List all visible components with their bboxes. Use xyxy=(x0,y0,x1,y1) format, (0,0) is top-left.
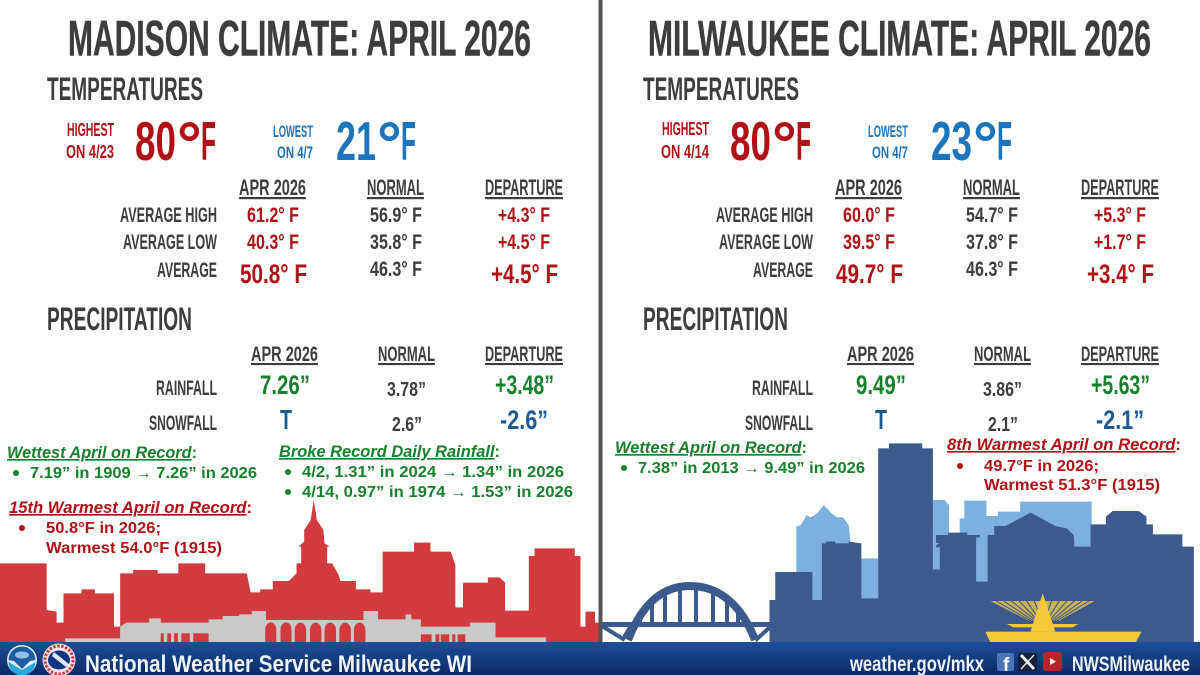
panel: Madison climate xyxy=(0,10,600,642)
temperature table: 61.2° F xyxy=(247,204,299,227)
icon: Facebook xyxy=(997,653,1014,675)
note: broke daily rainfall record: Broke Record Daily Rainfall: xyxy=(279,443,500,461)
temperature table: 40.3° F xyxy=(247,231,299,254)
divider between panels xyxy=(598,0,602,642)
lowest temperature callout: ON 4/7 xyxy=(872,143,908,162)
icon: NWS logo xyxy=(42,644,76,675)
temperature table: 56.9° F xyxy=(370,204,422,227)
note: wettest April xyxy=(615,439,865,477)
panel: Madison climate: F xyxy=(201,110,216,172)
highest temperature callout xyxy=(661,110,811,179)
icon: X xyxy=(1018,653,1037,671)
precipitation table: APR 2026 xyxy=(847,343,914,366)
temperature table: +4.5° F xyxy=(498,231,550,254)
note: warmest April rank: 50.8°F in 2026; xyxy=(46,520,161,537)
panel: Milwaukee climate: F xyxy=(796,110,811,172)
temperature table: 60.0° F xyxy=(843,204,895,227)
temperature table: +4.3° F xyxy=(498,204,550,227)
bridge xyxy=(602,586,770,640)
note: wettest April: Wettest April on Record: xyxy=(615,439,807,457)
lowest temperature callout: 23 xyxy=(931,110,972,172)
heading: precipitation: PRECIPITATION xyxy=(643,301,788,337)
temperature table: NORMAL xyxy=(963,175,1020,200)
precipitation table: RAINFALL xyxy=(156,377,217,400)
temperature table: AVERAGE HIGH xyxy=(716,204,813,227)
title: Madison: MADISON CLIMATE: APRIL 2026 xyxy=(68,10,531,66)
precipitation table xyxy=(149,343,563,436)
temperature table xyxy=(120,175,563,289)
panel: Milwaukee climate xyxy=(602,10,1194,642)
temperature table: NORMAL xyxy=(367,175,424,200)
temperature table: +3.4° F xyxy=(1087,259,1154,289)
panel: Madison climate: F xyxy=(401,110,416,172)
note: warmest April rank: Warmest 51.3°F (1915) xyxy=(984,477,1160,494)
icon: NOAA logo xyxy=(7,645,37,675)
temperature table: AVERAGE xyxy=(753,259,813,282)
precipitation table: 9.49” xyxy=(856,370,906,400)
note: wettest April: 7.38” in 2013 → 9.49” in 2026 xyxy=(638,460,865,477)
precipitation table: +5.63” xyxy=(1091,370,1150,400)
temperature table: 37.8° F xyxy=(966,231,1018,254)
highest temperature callout: 80 xyxy=(730,110,771,172)
temperature table: 50.8° F xyxy=(240,259,307,289)
highest temperature callout: HIGHEST xyxy=(67,120,114,140)
lowest temperature callout: LOWEST xyxy=(868,122,908,141)
note: warmest April rank xyxy=(9,499,252,557)
highest temperature callout: ON 4/14 xyxy=(661,142,709,162)
note: warmest April rank: 49.7°F in 2026; xyxy=(984,458,1099,475)
precipitation table: -2.6” xyxy=(500,405,548,435)
precipitation table xyxy=(745,343,1159,436)
note: warmest April rank xyxy=(947,436,1181,494)
temperature table: DEPARTURE xyxy=(485,175,563,200)
note: broke daily rainfall record: 4/14, 0.97” in 1974 → 1.53” in 2026 xyxy=(302,484,573,501)
precipitation table: +3.48” xyxy=(495,370,554,400)
heading: precipitation: PRECIPITATION xyxy=(47,301,192,337)
precipitation table: SNOWFALL xyxy=(745,412,813,435)
precipitation table: T xyxy=(280,404,292,435)
precipitation table: 7.26” xyxy=(260,370,310,400)
temperature table: 46.3° F xyxy=(966,258,1018,281)
icon: YouTube xyxy=(1043,652,1062,671)
precipitation table: RAINFALL xyxy=(752,377,813,400)
precipitation table: 3.78” xyxy=(387,379,426,401)
highest temperature callout xyxy=(66,110,216,179)
lowest temperature callout: LOWEST xyxy=(273,122,313,141)
heading: temperatures: TEMPERATURES xyxy=(47,71,203,107)
temperature table: 46.3° F xyxy=(370,258,422,281)
precipitation table: NORMAL xyxy=(378,343,435,366)
temperature table: +4.5° F xyxy=(491,259,558,289)
temperature table: AVERAGE LOW xyxy=(123,231,217,254)
highest temperature callout: ON 4/23 xyxy=(66,142,114,162)
highest temperature callout: ° xyxy=(177,110,202,179)
note: wettest April xyxy=(7,444,257,482)
temperature table: 39.5° F xyxy=(843,231,895,254)
temperature table xyxy=(716,175,1159,289)
lowest temperature callout: 21 xyxy=(336,110,376,172)
lowest temperature callout xyxy=(868,110,1012,179)
panel: Milwaukee climate: F xyxy=(997,110,1012,172)
note: warmest April rank: Warmest 54.0°F (1915) xyxy=(46,540,222,557)
temperature table: +5.3° F xyxy=(1094,204,1146,227)
note: broke daily rainfall record: 4/2, 1.31” in 2024 → 1.34” in 2026 xyxy=(302,464,564,481)
highest temperature callout: ° xyxy=(772,110,797,179)
note: warmest April rank: 15th Warmest April on Record: xyxy=(9,499,252,517)
temperature table: APR 2026 xyxy=(239,175,306,200)
temperature table: +1.7° F xyxy=(1094,231,1146,254)
note: warmest April rank: 8th Warmest April on Record: xyxy=(947,436,1181,454)
heading: temperatures: TEMPERATURES xyxy=(643,71,799,107)
temperature table: 35.8° F xyxy=(370,231,422,254)
precipitation table: NORMAL xyxy=(974,343,1031,366)
note: broke daily rainfall record xyxy=(279,443,573,501)
lowest temperature callout: ON 4/7 xyxy=(277,143,313,162)
temperature table: AVERAGE LOW xyxy=(719,231,813,254)
footer bar xyxy=(0,642,1200,675)
Madison skyline with capitol xyxy=(0,500,600,642)
lowest temperature callout: ° xyxy=(377,110,402,179)
precipitation table: DEPARTURE xyxy=(485,343,563,366)
temperature table: AVERAGE HIGH xyxy=(120,204,217,227)
buildings xyxy=(770,443,1194,642)
lowest temperature callout xyxy=(273,110,416,179)
precipitation table: 2.6” xyxy=(392,414,422,436)
note: wettest April: Wettest April on Record: xyxy=(7,444,197,462)
precipitation table: SNOWFALL xyxy=(149,412,217,435)
Milwaukee skyline with bridge and art museum xyxy=(602,443,1194,642)
temperature table: AVERAGE xyxy=(157,259,217,282)
precipitation table: APR 2026 xyxy=(251,343,318,366)
precipitation table: 3.86” xyxy=(983,379,1022,401)
temperature table: APR 2026 xyxy=(835,175,902,200)
temperature table: 49.7° F xyxy=(836,259,903,289)
lowest temperature callout: ° xyxy=(973,110,998,179)
precipitation table: 2.1” xyxy=(988,414,1018,436)
note: wettest April: 7.19” in 1909 → 7.26” in 2026 xyxy=(30,465,257,482)
highest temperature callout: 80 xyxy=(135,110,176,172)
highest temperature callout: HIGHEST xyxy=(662,119,709,139)
precipitation table: -2.1” xyxy=(1096,405,1144,435)
precipitation table: T xyxy=(875,404,887,435)
temperature table: 54.7° F xyxy=(966,204,1018,227)
